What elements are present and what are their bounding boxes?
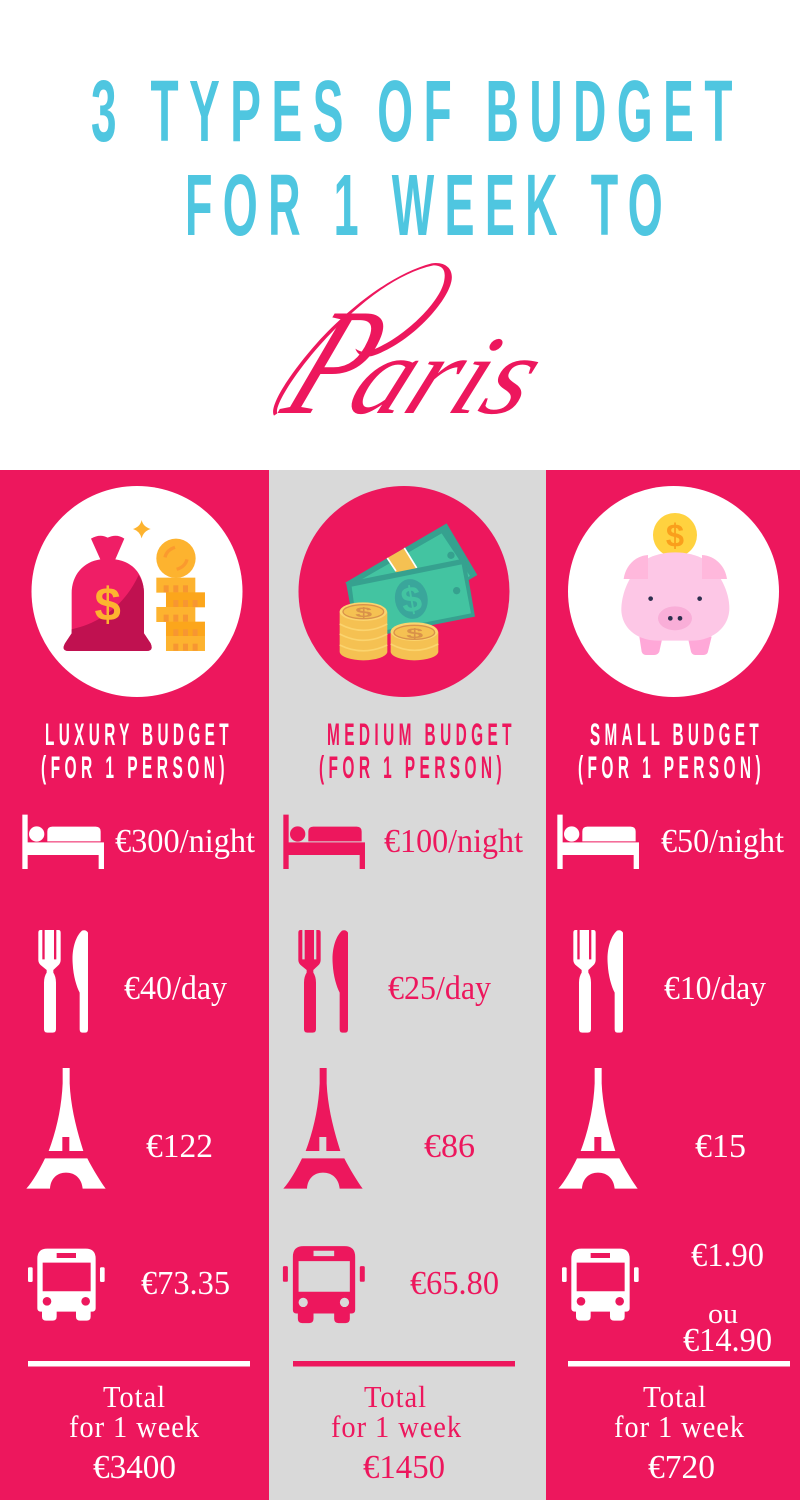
panel: luxury budget [0, 470, 269, 1500]
script word: Paris: P [263, 279, 410, 446]
panel: medium budget: MEDIUM BUDGET [327, 716, 516, 752]
total: luxury: for 1 week [69, 1409, 200, 1444]
icon: Eiffel tower [283, 1068, 363, 1189]
heading: luxury budget: (FOR 1 PERSON) [41, 749, 229, 785]
icon: bed [557, 815, 639, 869]
icon: piggy bank [568, 486, 779, 697]
icon: fork and knife [573, 930, 623, 1033]
script word: Paris [263, 263, 563, 446]
price: transport options: ou [708, 1298, 738, 1330]
total: medium: €1450 [363, 1449, 445, 1486]
price: hotel per night: €300/night [115, 823, 256, 860]
icon: banknotes and coins: $ [406, 626, 423, 641]
panel: luxury budget: LUXURY BUDGET [45, 716, 233, 752]
price: food per day: €25/day [388, 970, 491, 1007]
icon: bed [283, 815, 365, 869]
price: hotel per night: €100/night [384, 823, 524, 860]
heading: medium budget [319, 716, 516, 785]
icon: Eiffel tower [26, 1068, 106, 1189]
icon: fork and knife [38, 930, 88, 1033]
price: transport options: €1.90 [691, 1237, 764, 1274]
price: food per day: €10/day [664, 970, 766, 1007]
price: food per day: €40/day [124, 970, 227, 1007]
total: luxury: €3400 [93, 1449, 176, 1486]
icon: banknotes and coins [298, 486, 510, 697]
price: activities: €86 [424, 1128, 475, 1165]
price: transport options [683, 1237, 772, 1359]
icon: banknotes and coins: $ [355, 605, 372, 621]
icon: Eiffel tower [558, 1068, 638, 1189]
total: medium: Total [364, 1379, 427, 1414]
total: luxury [69, 1379, 200, 1486]
total: medium [331, 1379, 462, 1486]
heading: small budget [578, 716, 765, 785]
price: transport: €73.35 [141, 1265, 230, 1302]
price: transport options: €14.90 [683, 1322, 772, 1359]
icon: bus [283, 1246, 365, 1323]
icon: bus [562, 1249, 639, 1321]
icon: bus [28, 1249, 105, 1321]
price: activities: €122 [146, 1128, 213, 1165]
total: medium: for 1 week [331, 1409, 462, 1444]
icon: money bag and coins [32, 486, 242, 697]
icon: money bag and coins: $ [94, 579, 121, 632]
panel: medium budget [269, 470, 546, 1500]
total: small: €720 [648, 1449, 715, 1486]
icon: piggy bank: $ [666, 517, 684, 554]
price: activities: €15 [695, 1128, 746, 1165]
total: small [614, 1379, 745, 1486]
icon: bed [22, 815, 104, 869]
heading: luxury budget [41, 716, 233, 785]
script word: Paris: aris [332, 314, 563, 438]
total: small: for 1 week [614, 1409, 745, 1444]
icon: banknotes and coins: $ [398, 577, 425, 621]
icon: fork and knife [298, 930, 348, 1033]
title [91, 63, 743, 254]
total: small: Total [643, 1379, 707, 1414]
heading: medium budget: (FOR 1 PERSON) [319, 749, 506, 785]
price: hotel per night: €50/night [661, 823, 785, 860]
total: luxury: Total [103, 1379, 166, 1414]
panel: small budget [546, 470, 800, 1500]
price: transport: €65.80 [410, 1265, 499, 1302]
